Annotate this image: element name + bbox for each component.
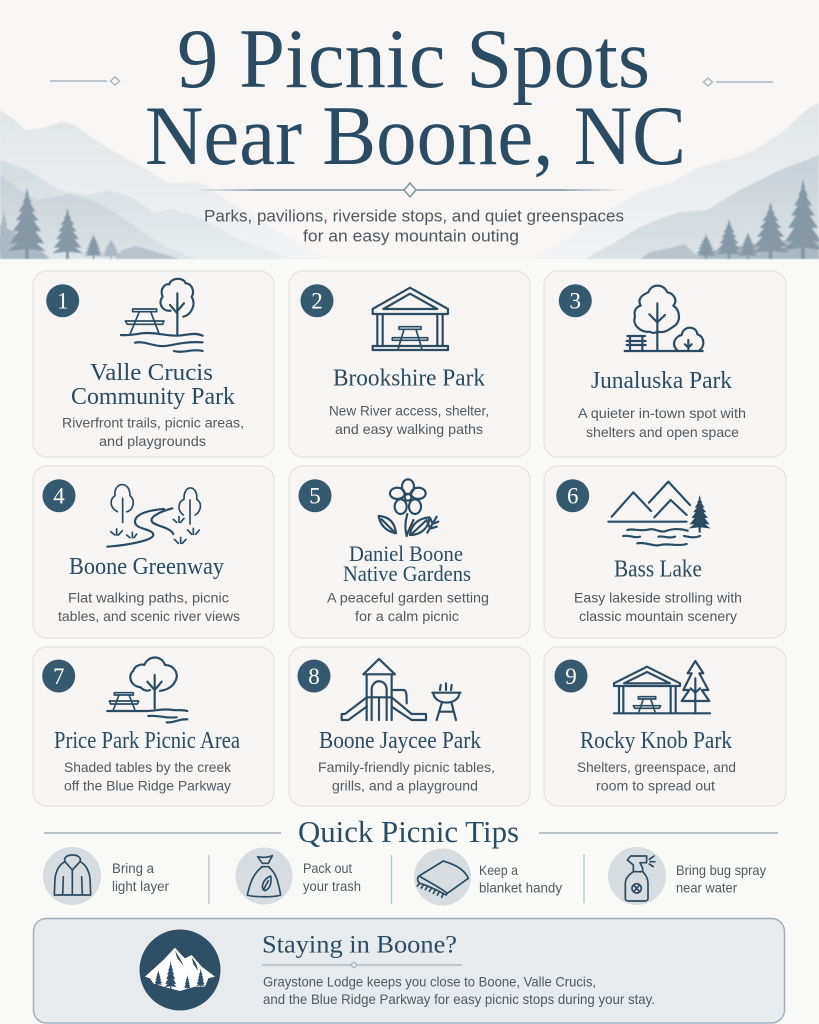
panel: 7 Price Park Picnic Area xyxy=(33,647,274,806)
panel: 1 Valle Crucis Community Park xyxy=(33,271,274,457)
description: and playgrounds xyxy=(99,433,206,449)
badge 3: 3 xyxy=(570,288,581,314)
tip: blanket xyxy=(414,848,562,906)
tip text: Pack out xyxy=(303,860,352,876)
ornament: callout rule xyxy=(262,962,462,968)
callout heading: Staying in Boone? xyxy=(262,930,457,958)
tip text xyxy=(479,862,562,896)
badge 7: 7 xyxy=(53,664,64,689)
park name: Native Gardens xyxy=(343,561,471,586)
description: Family-friendly picnic tables, xyxy=(318,759,495,775)
badge 5 xyxy=(298,479,332,512)
description: Easy lakeside strolling with xyxy=(574,590,742,606)
description xyxy=(58,590,240,624)
title: 9 Picnic Spots xyxy=(177,12,650,106)
tip: pack out trash xyxy=(236,848,361,904)
panel: 9 Rocky Knob Park xyxy=(544,647,786,806)
section heading: Quick Picnic Tips: Quick Picnic Tips xyxy=(298,814,519,849)
park name: Bass Lake xyxy=(614,556,702,582)
header: misty mountain landscape xyxy=(0,0,819,259)
subtitle: for an easy mountain outing xyxy=(303,228,519,246)
tip text: Bring a xyxy=(112,860,154,876)
panel: 5 Daniel Boone Native Gardens xyxy=(289,466,530,638)
description: classic mountain scenery xyxy=(579,608,737,624)
description: Flat walking paths, picnic xyxy=(68,590,229,606)
park name: Junaluska Park xyxy=(591,368,732,394)
tip text: light layer xyxy=(112,878,169,894)
badge 9 xyxy=(554,660,588,692)
park name: Rocky Knob Park xyxy=(580,728,732,754)
title xyxy=(145,12,686,183)
panel: 6 Bass Lake xyxy=(544,466,786,638)
icon: mountains, lake and pine xyxy=(608,482,711,545)
tip: light layer xyxy=(43,847,169,905)
tip text: your trash xyxy=(303,878,361,894)
badge 5: 5 xyxy=(309,484,321,508)
icon: flower with leaves xyxy=(379,479,438,536)
badge 8: 8 xyxy=(308,664,320,689)
description: Shelters, greenspace, and xyxy=(577,759,736,775)
ornament: title divider xyxy=(193,183,627,197)
park name: Valle Crucis xyxy=(90,360,213,386)
callout text: Graystone Lodge keeps you close to Boone, Valle Crucis, xyxy=(263,974,596,990)
icon: trash bag with leaf xyxy=(247,856,281,897)
badge 3 xyxy=(559,284,592,317)
panel: 8 Boone Jaycee Park xyxy=(289,647,530,806)
callout text xyxy=(263,974,655,1007)
park name: Boone Jaycee Park xyxy=(319,728,481,754)
description xyxy=(62,414,244,449)
badge 4: 4 xyxy=(53,484,65,508)
icon: picnic table, tree and river xyxy=(121,279,203,352)
description: grills, and a playground xyxy=(332,778,478,794)
title: Near Boone, NC xyxy=(145,89,686,183)
icon: creekside picnic table and tree xyxy=(107,657,187,722)
park name xyxy=(71,360,235,410)
description xyxy=(327,590,489,624)
tip text xyxy=(303,860,361,894)
tip: bug spray xyxy=(608,847,766,905)
panel: 4 Boone Greenway xyxy=(33,466,274,638)
tip text: near water xyxy=(676,880,737,896)
icon: folded blanket xyxy=(417,861,468,897)
badge 1: 1 xyxy=(57,288,68,314)
park name: Boone Greenway xyxy=(69,554,224,580)
badge 2: 2 xyxy=(311,288,323,314)
tip text: blanket handy xyxy=(479,880,562,896)
description xyxy=(64,759,232,794)
description xyxy=(574,590,742,624)
park name: Price Park Picnic Area xyxy=(54,728,240,754)
tip text: Bring bug spray xyxy=(676,862,766,878)
description xyxy=(329,402,489,437)
subtitle: Parks, pavilions, riverside stops, and quiet greenspaces xyxy=(204,208,624,226)
description: room to spread out xyxy=(596,778,715,794)
badge 9: 9 xyxy=(565,664,577,689)
description: Shaded tables by the creek xyxy=(64,759,232,775)
description xyxy=(318,759,495,794)
description: off the Blue Ridge Parkway xyxy=(64,778,231,794)
subtitle xyxy=(204,208,624,246)
divider xyxy=(209,854,584,904)
description: shelters and open space xyxy=(586,424,739,440)
ornament: right title flourish xyxy=(704,78,773,86)
badge 2 xyxy=(300,284,334,317)
tip text xyxy=(112,860,169,894)
description: tables, and scenic river views xyxy=(58,608,240,624)
description xyxy=(577,759,736,794)
panel: 3 Junaluska Park xyxy=(544,271,786,457)
park name xyxy=(343,541,471,586)
icon: jacket xyxy=(54,855,91,895)
panel: Staying in Boone callout xyxy=(34,918,784,1023)
badge 8 xyxy=(298,660,330,692)
park name: Community Park xyxy=(71,384,235,410)
description: New River access, shelter, xyxy=(329,402,489,418)
panel: 2 Brookshire Park xyxy=(289,271,530,457)
icon: winding greenway path xyxy=(107,485,200,547)
icon: spray bottle xyxy=(625,856,655,901)
description: A quieter in-town spot with xyxy=(578,405,746,421)
description: A peaceful garden setting xyxy=(327,590,489,606)
icon: picnic shelter xyxy=(373,288,448,350)
description: Riverfront trails, picnic areas, xyxy=(62,414,244,430)
badge 6 xyxy=(556,479,589,512)
icon: playground and grill xyxy=(342,659,461,720)
tip text: Keep a xyxy=(479,862,518,878)
badge 7 xyxy=(42,660,75,692)
description: for a calm picnic xyxy=(355,608,459,624)
callout text: and the Blue Ridge Parkway for easy picnic stops during your stay. xyxy=(263,991,655,1007)
icon: tree, bush and bench xyxy=(625,286,703,351)
badge 6: 6 xyxy=(567,484,578,508)
description: and easy walking paths xyxy=(335,421,483,437)
tip text xyxy=(676,862,766,896)
park name: Brookshire Park xyxy=(333,366,485,392)
badge 1 xyxy=(46,284,79,317)
badge 4 xyxy=(42,479,76,512)
description xyxy=(578,405,746,440)
icon: mountain badge xyxy=(140,930,220,1010)
ornament: left title flourish xyxy=(50,77,120,85)
park name: Daniel Boone xyxy=(349,541,463,566)
icon: shelter and evergreen xyxy=(614,661,710,713)
